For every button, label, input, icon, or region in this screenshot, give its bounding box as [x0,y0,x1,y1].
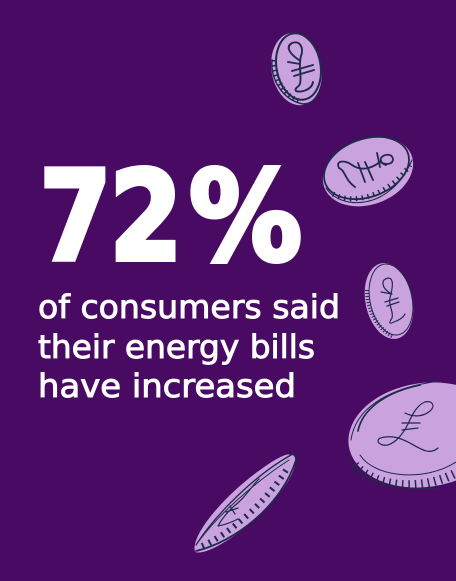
description text: their energy bills [38,328,315,366]
headline statistic: 72% [40,146,302,290]
icon: coin bottom flat [195,454,296,552]
description text: of consumers said [38,288,340,326]
description text: have increased [38,367,296,405]
icon: coin middle right [358,258,420,344]
headline statistic: 72%: % [189,146,302,290]
headline statistic: 72%: 2 [110,146,182,290]
icon: coin top [266,29,327,109]
description text [38,288,340,405]
icon: coin lower right large [342,373,456,497]
headline statistic: 72%: 7 [40,146,112,290]
icon: coin upper right [313,125,423,218]
